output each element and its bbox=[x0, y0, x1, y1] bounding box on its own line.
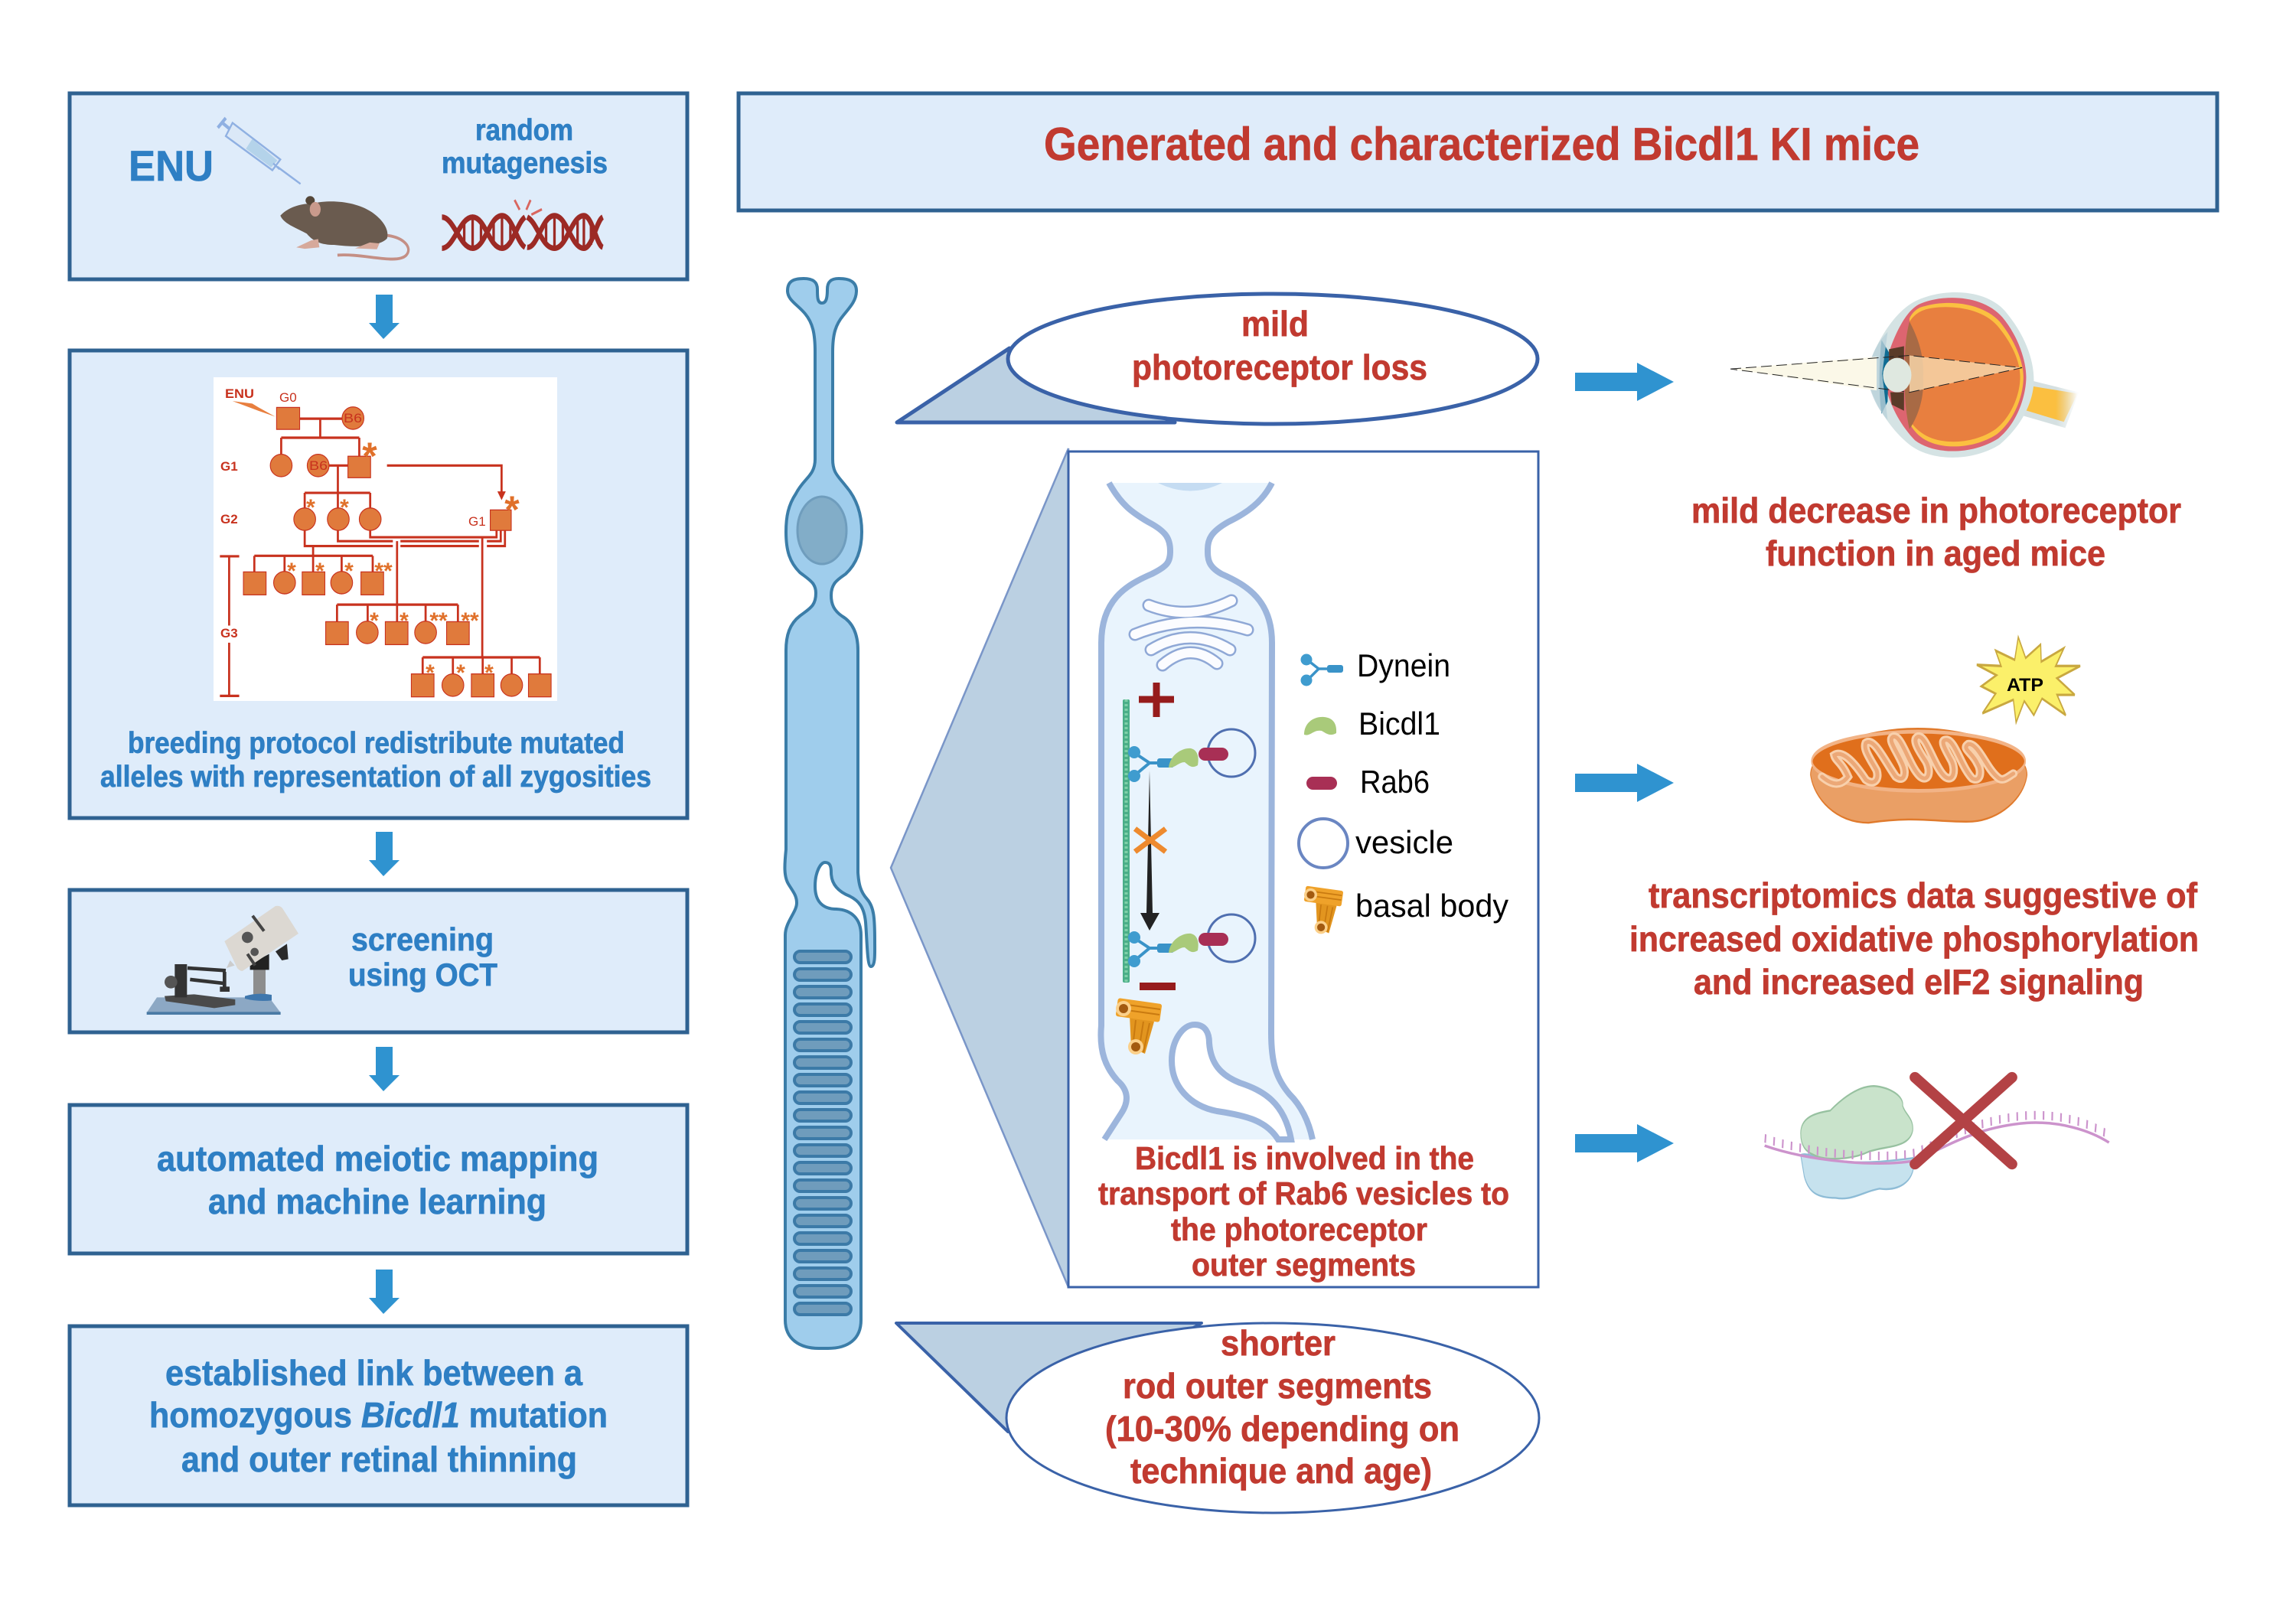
icon: mouse bbox=[280, 196, 409, 259]
panel: meiotic mapping: and machine learning bbox=[208, 1182, 546, 1221]
text: mild decrease: mild decrease in photoreceptor bbox=[1691, 491, 2181, 530]
pedigree chart: * bbox=[344, 559, 354, 584]
title panel bbox=[739, 93, 2217, 210]
text: Bicdl1 role: the photoreceptor bbox=[1171, 1211, 1427, 1247]
text: screening using OCT: screening bbox=[351, 921, 494, 957]
arrow: down 1 bbox=[369, 295, 400, 339]
text: Bicdl1 role: transport of Rab6 vesicles to bbox=[1098, 1175, 1509, 1211]
pedigree chart: * bbox=[456, 660, 465, 686]
pedigree chart: G1 bbox=[468, 514, 486, 529]
pedigree chart: * bbox=[370, 608, 379, 634]
callout: shorter rod outer segments: technique and age) bbox=[1130, 1451, 1432, 1491]
callout: mild photoreceptor loss bbox=[897, 294, 1538, 424]
transport arrow bbox=[1140, 771, 1159, 931]
panel: breeding protocol bbox=[70, 350, 687, 818]
golgi bbox=[1135, 601, 1247, 665]
text: transcriptomics: and increased eIF2 signaling bbox=[1694, 962, 2144, 1002]
microtubule bbox=[1123, 699, 1130, 983]
icon: OCT instrument bbox=[147, 906, 298, 1015]
icon: Rab6 bbox=[1306, 777, 1337, 790]
arrow: down 4 bbox=[369, 1270, 400, 1314]
arrow: to ribosome bbox=[1575, 1124, 1674, 1162]
panel: established link: and outer retinal thinning bbox=[181, 1439, 577, 1479]
legend bbox=[1299, 647, 1508, 934]
text: screening using OCT bbox=[348, 921, 497, 993]
text: random mutagenesis bbox=[442, 114, 608, 180]
pedigree chart: G3 bbox=[220, 626, 238, 641]
pedigree chart: G1 bbox=[220, 459, 238, 474]
pedigree chart bbox=[214, 377, 557, 701]
arrow: down 2 bbox=[369, 832, 400, 876]
text: screening using OCT: using OCT bbox=[348, 957, 497, 993]
callout: shorter rod outer segments bbox=[896, 1323, 1539, 1513]
callout: shorter rod outer segments: shorter bbox=[1221, 1323, 1336, 1363]
icon: ATP burst bbox=[1977, 637, 2080, 722]
panel: detail of transport bbox=[1068, 451, 1538, 1287]
heading: ENU: ENU bbox=[129, 142, 214, 190]
pedigree chart: ** bbox=[461, 608, 479, 634]
text: vesicle: vesicle bbox=[1355, 824, 1453, 860]
plus sign bbox=[1139, 683, 1174, 717]
icon: DNA with break bbox=[442, 200, 603, 249]
motor complex with vesicle, top bbox=[1128, 729, 1255, 782]
text: random mutagenesis: mutagenesis bbox=[442, 147, 608, 180]
nucleus bbox=[797, 497, 846, 564]
text: Bicdl1 role: outer segments bbox=[1192, 1247, 1416, 1283]
panel: established link bbox=[70, 1326, 687, 1505]
text: breeding caption bbox=[100, 727, 651, 794]
icon: vesicle bbox=[1299, 819, 1348, 868]
text: transcriptomics: transcriptomics data suggestive of bbox=[1649, 875, 2198, 915]
callout: mild photoreceptor loss: mild bbox=[1241, 304, 1309, 344]
text: mild decrease bbox=[1691, 491, 2181, 573]
pedigree chart: * bbox=[426, 660, 435, 686]
text: mild decrease: function in aged mice bbox=[1766, 533, 2105, 573]
arrow: down 3 bbox=[369, 1047, 400, 1091]
minus sign bbox=[1140, 983, 1176, 990]
text: transcriptomics: increased oxidative phosphorylation bbox=[1629, 919, 2199, 959]
icon: basal body bbox=[1304, 886, 1343, 934]
panel: screening using OCT bbox=[70, 890, 687, 1032]
arrow: to mitochondrion bbox=[1575, 764, 1674, 802]
pedigree chart: G0 bbox=[279, 390, 297, 405]
panel: established link: established link between a bbox=[165, 1353, 582, 1393]
pedigree chart: * bbox=[504, 488, 520, 531]
text: transcriptomics bbox=[1629, 875, 2199, 1002]
pedigree chart: ENU bbox=[225, 386, 254, 401]
icon: eye bbox=[1730, 292, 2079, 458]
icon: mitochondrion bbox=[1811, 729, 2027, 823]
callout: mild photoreceptor loss: photoreceptor loss bbox=[1132, 347, 1427, 387]
pedigree chart: G2 bbox=[220, 512, 238, 526]
motor complex with vesicle, bottom bbox=[1128, 914, 1255, 967]
panel: meiotic mapping: automated meiotic mapping bbox=[157, 1139, 598, 1178]
icon: Bicdl1 bbox=[1304, 717, 1336, 735]
illustration: photoreceptor cell bbox=[784, 279, 875, 1348]
icon: syringe bbox=[218, 118, 301, 184]
pedigree chart: * bbox=[400, 608, 409, 634]
arrow: to eye bbox=[1575, 363, 1674, 401]
pedigree chart: * bbox=[484, 660, 494, 686]
text: Bicdl1 role: Bicdl1 is involved in the bbox=[1135, 1140, 1474, 1176]
text: random mutagenesis: random bbox=[475, 114, 573, 147]
pedigree chart: * bbox=[362, 435, 377, 478]
pedigree chart: B6 bbox=[344, 411, 362, 425]
text: Bicdl1: Bicdl1 bbox=[1358, 706, 1440, 742]
pedigree chart: * bbox=[287, 559, 296, 584]
text: breeding caption: breeding protocol redistribute mutated bbox=[128, 727, 625, 760]
pedigree chart: * bbox=[315, 559, 325, 584]
pedigree chart: B6 bbox=[309, 458, 328, 473]
text: Rab6: Rab6 bbox=[1360, 764, 1430, 800]
panel: ENU random mutagenesis bbox=[70, 93, 687, 279]
zoom wedge bbox=[891, 448, 1068, 1287]
pedigree chart: ** bbox=[429, 608, 448, 634]
pedigree chart: * bbox=[306, 495, 315, 520]
text: Dynein: Dynein bbox=[1357, 647, 1450, 683]
panel: established link: homozygous Bicdl1 mutation bbox=[149, 1395, 608, 1435]
text: Bicdl1 role bbox=[1098, 1140, 1509, 1283]
pedigree chart: * bbox=[340, 495, 349, 520]
icon: basal body in cell bbox=[1116, 998, 1162, 1054]
panel: meiotic mapping bbox=[70, 1105, 687, 1253]
orange X bbox=[1135, 829, 1166, 852]
text: basal body: basal body bbox=[1355, 888, 1508, 924]
pedigree chart: ** bbox=[374, 559, 393, 584]
title panel: Generated and characterized Bicdl1 KI mice bbox=[1044, 119, 1919, 170]
icon: ATP burst: ATP bbox=[2007, 675, 2043, 696]
callout: shorter rod outer segments: (10-30% depending on bbox=[1105, 1409, 1459, 1449]
callout: shorter rod outer segments: rod outer segments bbox=[1123, 1366, 1432, 1406]
icon: ribosome with crossed mRNA bbox=[1765, 1077, 2109, 1198]
text: breeding caption: alleles with representation of all zygosities bbox=[100, 761, 651, 794]
illustration: cell close-up bbox=[1101, 483, 1313, 1139]
outer segment discs bbox=[794, 951, 851, 1315]
icon: dynein bbox=[1301, 654, 1343, 686]
